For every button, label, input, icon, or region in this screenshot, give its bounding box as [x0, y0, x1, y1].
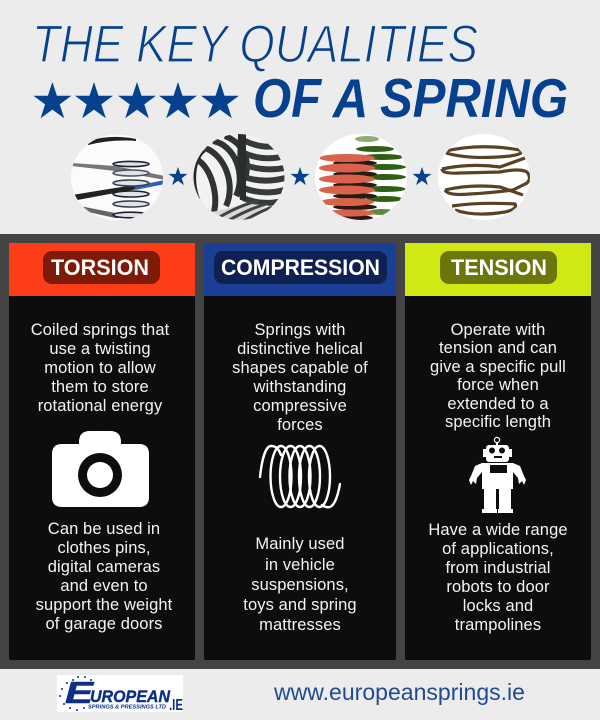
text: torsion uses: Can be used in	[48, 520, 160, 538]
text: torsion uses: clothes pins,	[57, 539, 151, 557]
text: compression description: Springs with	[254, 321, 346, 339]
text: compression description: compressive	[253, 397, 347, 415]
text: tension description: give a specific pull	[430, 358, 566, 376]
text: torsion uses: of garage doors	[45, 615, 163, 633]
text: tension uses: from industrial	[445, 559, 551, 577]
text: compression uses	[243, 535, 357, 634]
text: tension uses: of applications,	[442, 540, 554, 558]
pill: compression: COMPRESSION	[221, 255, 380, 280]
text: tension description: Operate with	[451, 321, 545, 339]
text: tension description: force when	[457, 376, 539, 394]
photo: silver spring	[71, 134, 163, 220]
text: compression uses: suspensions,	[251, 576, 349, 594]
logo: European Springs	[57, 675, 183, 714]
panel: tension	[405, 243, 591, 660]
text: torsion uses: and even to	[60, 577, 148, 595]
pill: torsion: TORSION	[51, 255, 149, 280]
text: compression description: forces	[277, 416, 323, 434]
logo: European Springs: UROPEAN	[90, 687, 171, 706]
text: compression description	[232, 321, 368, 434]
title	[32, 15, 568, 129]
header: tension	[405, 243, 591, 296]
text: compression uses: Mainly used	[255, 535, 345, 553]
text: torsion description	[31, 321, 170, 415]
star separator	[168, 167, 188, 185]
text: compression uses: in vehicle	[265, 556, 335, 574]
star separator	[290, 167, 310, 185]
pill: torsion	[43, 251, 160, 284]
logo: European Springs: .IE	[169, 697, 183, 714]
text: compression uses: mattresses	[259, 616, 341, 634]
logo: European Springs: SPRINGS & PRESSINGS LTD	[88, 704, 166, 710]
text: tension description: extended to a	[447, 395, 549, 413]
panel: compression	[204, 243, 396, 660]
text: torsion description: use a twisting	[49, 340, 151, 358]
text: tension uses: Have a wide range	[428, 521, 568, 539]
icon: camera	[52, 431, 149, 507]
text: tension uses: robots to door	[446, 578, 550, 596]
website url: www.europeansprings.ie	[273, 679, 525, 705]
star separator	[412, 167, 432, 185]
title line one: THE KEY QUALITIES	[32, 15, 478, 74]
dark panel band	[0, 234, 600, 669]
text: tension uses: locks and	[463, 597, 533, 615]
text: torsion description: Coiled springs that	[31, 321, 170, 339]
text: compression description: withstanding	[253, 378, 346, 396]
text: compression description: distinctive helical	[237, 340, 363, 358]
header: torsion	[9, 243, 195, 296]
photo: red and green coils	[315, 134, 407, 220]
text: tension uses: trampolines	[455, 616, 541, 634]
panel: torsion	[9, 243, 195, 660]
text: torsion uses: support the weight	[36, 596, 173, 614]
text: tension description: tension and can	[439, 339, 557, 357]
logo wordmark: E	[65, 675, 95, 710]
text: tension description	[430, 321, 566, 431]
text: tension description: specific length	[445, 413, 551, 431]
text: torsion description: them to store	[51, 378, 149, 396]
icon: coil spring	[260, 446, 340, 507]
photo: dark coils	[194, 134, 284, 220]
text: tension uses	[428, 521, 568, 634]
header: compression	[204, 243, 396, 296]
text: torsion uses	[36, 520, 173, 633]
text: torsion uses: digital cameras	[48, 558, 160, 576]
icon: robot	[469, 437, 526, 513]
photo: bronze coil	[438, 134, 530, 220]
five rating stars	[33, 82, 239, 118]
text: compression uses: toys and spring	[243, 596, 357, 614]
pill: tension	[440, 251, 557, 284]
pill: tension: TENSION	[451, 255, 547, 280]
text: compression description: shapes capable of	[232, 359, 368, 377]
title line two: OF A SPRING	[253, 67, 568, 129]
text: torsion description: motion to allow	[44, 359, 156, 377]
text: torsion description: rotational energy	[38, 397, 163, 415]
